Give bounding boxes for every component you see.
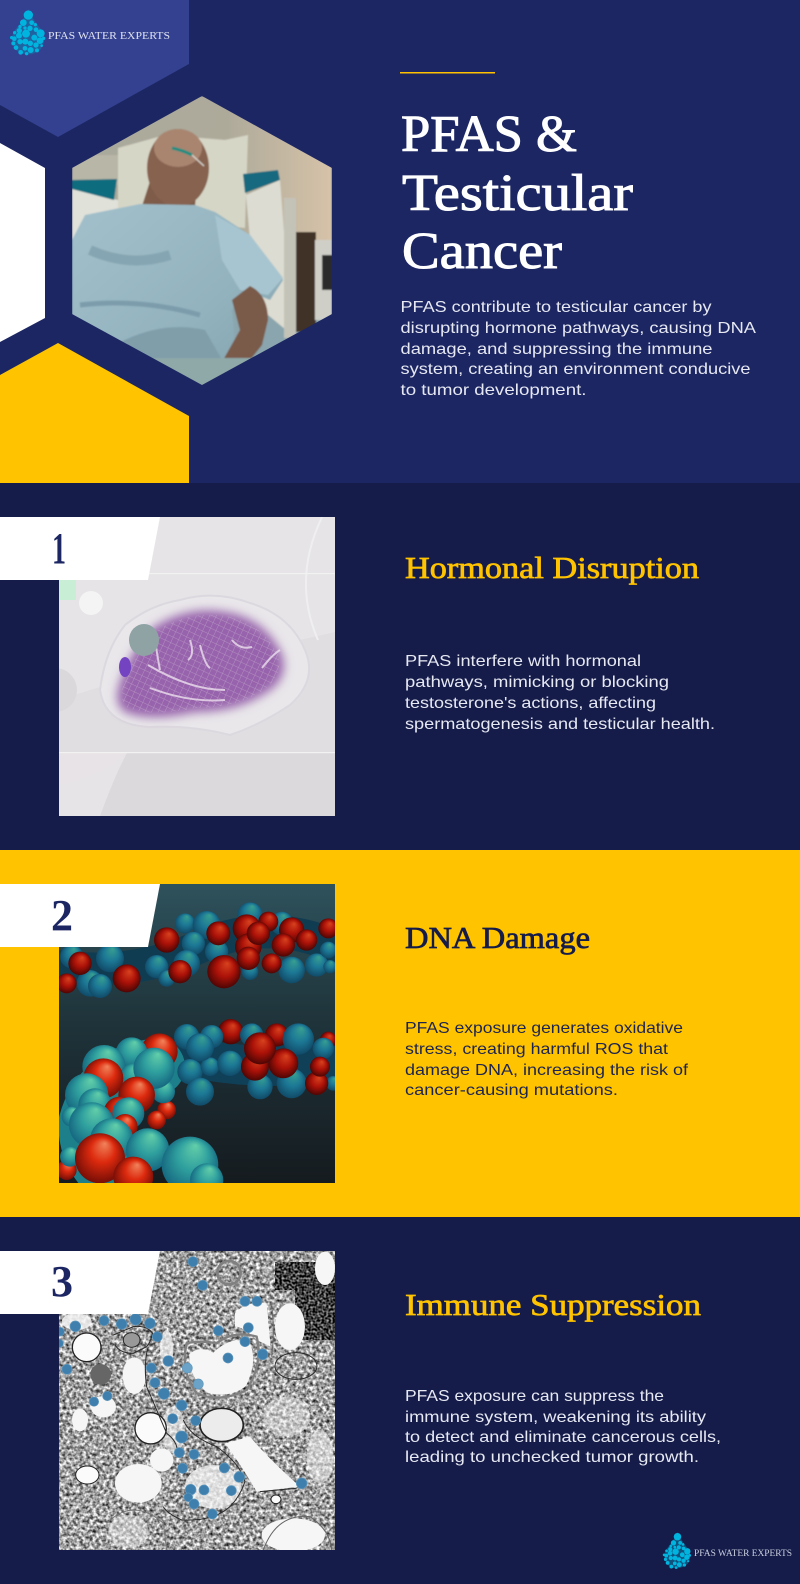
number tag 1 <box>0 517 160 580</box>
panel: dna damage <box>0 850 800 1217</box>
text: immune suppression <box>405 1388 721 1466</box>
intro text: damage, and suppressing the immune <box>400 341 713 358</box>
number tag 2: 2 <box>51 891 73 940</box>
hexagon: top blue <box>0 0 189 137</box>
number tag 3: 3 <box>51 1257 73 1306</box>
heading: dna damage: DNA Damage <box>405 920 590 955</box>
heading: immune suppression: Immune Suppression <box>405 1287 702 1322</box>
title <box>401 106 633 280</box>
intro text: to tumor development. <box>400 382 586 399</box>
image: brain <box>33 517 335 816</box>
number tag 2 <box>0 884 160 947</box>
image: molecular strands <box>57 884 341 1197</box>
hexagon: left white <box>0 143 45 342</box>
intro text: system, creating an environment conducive <box>400 361 751 378</box>
text: dna damage: cancer-causing mutations. <box>405 1082 618 1099</box>
panel: header <box>0 0 800 483</box>
accent line <box>400 72 495 74</box>
heading: hormonal disruption: Hormonal Disruption <box>405 550 700 585</box>
logo: top: PFAS WATER EXPERTS <box>48 30 170 42</box>
text: dna damage: damage DNA, increasing the risk of <box>405 1062 689 1079</box>
image: micrograph of cell with virus particles <box>55 1251 335 1552</box>
title: PFAS & <box>401 106 577 163</box>
text: dna damage <box>405 1020 689 1099</box>
text: dna damage: PFAS exposure generates oxidative <box>405 1020 683 1037</box>
logo: top <box>10 9 170 55</box>
logo: bottom: PFAS WATER EXPERTS <box>694 1548 792 1558</box>
text: immune suppression: PFAS exposure can suppress the <box>405 1388 664 1405</box>
text: hormonal disruption: PFAS interfere with hormonal <box>405 653 641 670</box>
text: dna damage: stress, creating harmful ROS that <box>405 1041 669 1058</box>
intro text <box>400 299 756 399</box>
hexagon: bottom yellow <box>0 343 189 483</box>
number tag 3 <box>0 1251 160 1314</box>
logo: bottom <box>663 1532 792 1569</box>
panel: hormonal disruption <box>0 517 714 816</box>
text: hormonal disruption: spermatogenesis and testicular health. <box>405 716 715 733</box>
intro text: PFAS contribute to testicular cancer by <box>400 299 712 316</box>
panel: immune suppression <box>0 1251 792 1569</box>
text: hormonal disruption <box>405 653 715 733</box>
photo: patient in hospital bed <box>72 96 332 390</box>
text: immune suppression: leading to unchecked tumor growth. <box>405 1449 699 1466</box>
number tag 1: 1 <box>52 524 66 573</box>
text: immune suppression: to detect and eliminate cancerous cells, <box>405 1429 721 1446</box>
text: hormonal disruption: pathways, mimicking or blocking <box>405 674 669 691</box>
text: immune suppression: immune system, weakening its ability <box>405 1409 706 1426</box>
title: Cancer <box>402 223 562 280</box>
intro text: disrupting hormone pathways, causing DNA <box>400 320 756 337</box>
text: hormonal disruption: testosterone's actions, affecting <box>405 695 656 712</box>
title: Testicular <box>402 165 633 222</box>
